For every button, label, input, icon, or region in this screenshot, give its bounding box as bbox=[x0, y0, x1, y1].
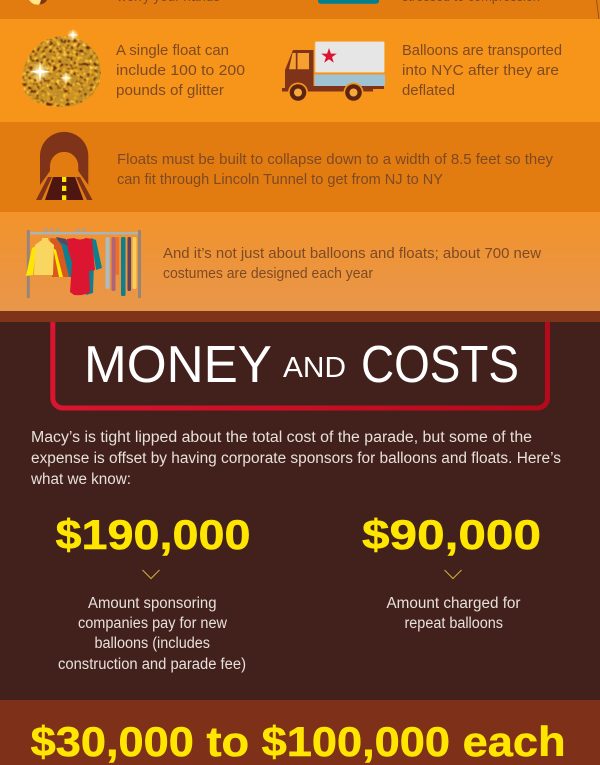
heading: money and costs bbox=[84, 336, 519, 394]
icon: delivery truck bbox=[282, 42, 385, 102]
text: repeat balloon caption: Amount charged for bbox=[386, 595, 520, 612]
icon: chevron left bbox=[142, 570, 160, 578]
panel: bottom stat bbox=[0, 700, 600, 765]
text: balloon transport fact: deflated bbox=[402, 82, 455, 99]
panel: glitter and transport bbox=[0, 19, 600, 122]
icon: clipped top-left icon bbox=[29, 0, 47, 5]
text: new balloon caption: companies pay for new bbox=[78, 615, 228, 632]
text: glitter fact bbox=[116, 42, 245, 99]
text: tunnel fact: can fit through Lincoln Tunnel to get from NJ to NY bbox=[117, 171, 443, 188]
panel: tunnel bbox=[0, 122, 600, 212]
stat: new balloon cost: $190,000 bbox=[56, 511, 250, 558]
text: intro paragraph: Macy’s is tight lipped about the total cost of the parade, but some of the bbox=[31, 429, 532, 446]
stat: repeat balloon cost: $90,000 bbox=[362, 511, 541, 558]
divider band bbox=[0, 311, 600, 322]
icon: glitter ball bbox=[22, 29, 101, 107]
icon: chevron right bbox=[444, 570, 462, 578]
panel: costumes bbox=[0, 212, 600, 311]
text: glitter fact: pounds of glitter bbox=[116, 82, 224, 99]
text: new balloon caption: construction and parade fee) bbox=[58, 656, 246, 673]
stat: repeat balloon cost bbox=[362, 511, 541, 632]
text: intro paragraph bbox=[30, 429, 561, 488]
icon: clothes rack bbox=[26, 229, 141, 298]
text: glitter fact: A single float can bbox=[116, 42, 229, 59]
text: tunnel fact bbox=[117, 151, 553, 188]
stat: new balloon cost bbox=[56, 511, 250, 673]
text: balloon transport fact: into NYC after they are bbox=[402, 62, 559, 79]
text: intro paragraph: what we know: bbox=[30, 471, 131, 488]
heading: money and costs: COSTS bbox=[361, 336, 519, 394]
text: balloon transport fact bbox=[402, 42, 562, 99]
heading frame bbox=[53, 322, 548, 408]
text: glitter fact: include 100 to 200 bbox=[116, 62, 245, 79]
panel: money and costs bbox=[0, 322, 600, 700]
text: costumes fact bbox=[163, 245, 541, 282]
text: intro paragraph: expense is offset by having corporate sponsors for balloons and floats. Here’s bbox=[31, 450, 561, 467]
text: new balloon caption: Amount sponsoring bbox=[88, 595, 216, 612]
text: costumes fact: costumes are designed each year bbox=[163, 265, 373, 282]
band: clipped top row bbox=[0, 0, 600, 28]
edge line bbox=[596, 0, 600, 28]
text: new balloon caption bbox=[58, 595, 246, 673]
text: tunnel fact: Floats must be built to collapse down to a width of 8.5 feet so they bbox=[117, 151, 553, 168]
text: costumes fact: And it’s not just about balloons and floats; about 700 new bbox=[163, 245, 541, 262]
stat: float sponsorship range: $30,000 to $100,000 each bbox=[31, 718, 566, 765]
heading: money and costs: AND bbox=[283, 352, 346, 384]
text: repeat balloon caption bbox=[386, 595, 520, 632]
icon: tunnel bbox=[36, 132, 92, 200]
icon: clipped teal panel bbox=[318, 0, 379, 4]
heading: money and costs: MONEY bbox=[84, 336, 272, 394]
text: repeat balloon caption: repeat balloons bbox=[404, 615, 503, 632]
text: balloon transport fact: Balloons are transported bbox=[402, 42, 562, 59]
text: new balloon caption: balloons (includes bbox=[94, 635, 210, 652]
